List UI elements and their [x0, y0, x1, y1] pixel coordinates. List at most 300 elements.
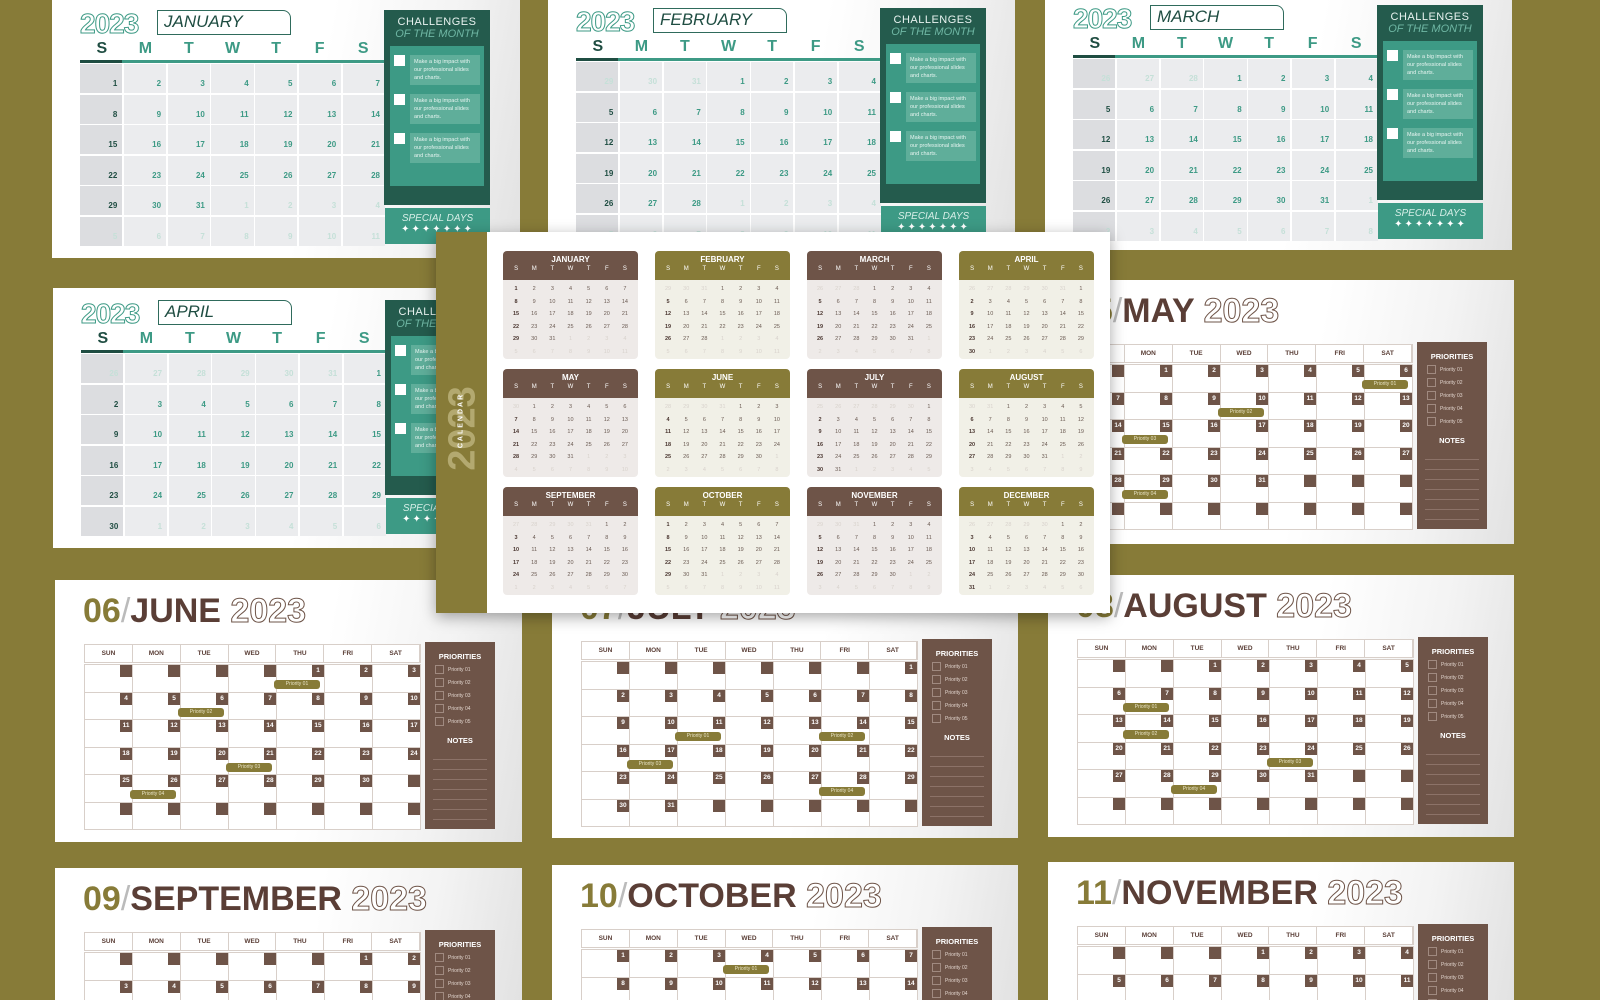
- center card: 2023 yearly calendar: 6: [891, 348, 894, 354]
- center card: 2023 yearly calendar: 17: [969, 560, 975, 566]
- center card: 2023 yearly calendar: 29: [683, 404, 689, 410]
- center card: 2023 yearly calendar: S: [1079, 266, 1083, 272]
- slide: April (teal): 18: [197, 461, 206, 470]
- center card: 2023 yearly calendar: 4: [515, 466, 518, 472]
- slide: January (teal): 8: [244, 232, 249, 241]
- center card: 2023 yearly calendar: 29: [871, 572, 878, 578]
- center card: 2023 yearly calendar: 4: [569, 286, 572, 292]
- center card: 2023 yearly calendar: 13: [835, 311, 841, 317]
- center card: 2023 yearly calendar: 4: [1007, 298, 1010, 304]
- center card: 2023 yearly calendar: T: [1043, 384, 1046, 390]
- center card: 2023 yearly calendar: 30: [513, 404, 519, 410]
- center card: 2023 yearly calendar: 27: [513, 522, 519, 528]
- center card: 2023 yearly calendar: 2: [605, 454, 608, 460]
- slide: April (teal): 5: [245, 400, 250, 409]
- slide: March (teal): 28: [1189, 196, 1198, 205]
- slide: June (brown): 4: [124, 694, 128, 702]
- center card: 2023 yearly calendar: 21: [853, 560, 859, 566]
- center card: 2023 yearly calendar: 7: [855, 534, 858, 540]
- slide: July (brown): 13: [811, 719, 819, 726]
- slide: September (brown): 6: [268, 982, 272, 990]
- center card: 2023 yearly calendar: S: [1079, 384, 1083, 390]
- slide: October (brown): TUE: [695, 935, 708, 942]
- center card: 2023 yearly calendar: 20: [890, 442, 896, 448]
- center card: 2023 yearly calendar: T: [739, 266, 742, 272]
- center card: 2023 yearly calendar: 30: [1023, 454, 1030, 460]
- center card: 2023 yearly calendar: 19: [683, 442, 689, 448]
- center card: 2023 yearly calendar: 1: [721, 286, 724, 292]
- slide: August (brown): FRI: [1335, 645, 1346, 652]
- slide: June (brown): 23: [362, 750, 370, 756]
- slide: August (brown): Priority 05: [1441, 714, 1464, 720]
- slide: April (teal): 5: [333, 522, 337, 531]
- center card: 2023 yearly calendar: 8: [605, 534, 608, 540]
- slide: April (teal): CHALLENGES: [398, 306, 477, 318]
- slide: January (teal): Make a big impact with our professional slides and charts.: [414, 59, 470, 81]
- center card: 2023 yearly calendar: 29: [817, 522, 823, 528]
- center card: 2023 yearly calendar: 16: [531, 311, 537, 317]
- center card: 2023 yearly calendar: 18: [853, 442, 859, 448]
- slide: October (brown): Priority 02: [945, 964, 968, 970]
- center card: 2023 yearly calendar: 2: [873, 466, 876, 472]
- center card: 2023 yearly calendar: 27: [701, 454, 707, 460]
- center card: 2023 yearly calendar: 2: [623, 522, 626, 528]
- slide: June (brown): Priority 04: [448, 706, 471, 712]
- center card: 2023 yearly calendar: 7: [515, 416, 518, 422]
- center card: 2023 yearly calendar: 24: [987, 336, 993, 342]
- slide: June (brown): FRI: [342, 650, 353, 657]
- center card: 2023 yearly calendar: 14: [719, 429, 726, 435]
- slide: July (brown): 07/JULY 2023: [580, 589, 796, 627]
- center card: 2023 yearly calendar: 4: [775, 336, 778, 342]
- center card: 2023 yearly calendar: 6: [891, 416, 894, 422]
- slide: May (brown): Priority 03: [1440, 392, 1463, 398]
- slide: July (brown): 7: [861, 692, 865, 698]
- slide: February (teal): 2: [784, 77, 788, 86]
- center card: 2023 yearly calendar: F: [757, 266, 761, 272]
- slide: August (brown): 5: [1405, 662, 1409, 669]
- center card: 2023 yearly calendar: 5: [1061, 348, 1064, 354]
- center card: 2023 yearly calendar: 7: [909, 348, 912, 354]
- slide: May (brown): 12: [1354, 394, 1362, 402]
- center card: 2023 yearly calendar: 15: [604, 547, 610, 553]
- slide: February (teal): 30: [648, 77, 657, 86]
- center card: 2023 yearly calendar: 21: [586, 560, 592, 566]
- center card: 2023 yearly calendar: 8: [569, 348, 572, 354]
- center card: 2023 yearly calendar: 29: [1078, 336, 1084, 342]
- slide: May (brown): 25: [1306, 450, 1314, 456]
- slide: July (brown): 20: [811, 746, 819, 754]
- slide: March (teal): 8: [1237, 105, 1242, 114]
- center card: 2023 yearly calendar: 3: [989, 298, 992, 304]
- center card: 2023 yearly calendar: 24: [701, 560, 707, 566]
- center card: 2023 yearly calendar: 12: [586, 298, 592, 304]
- center card: 2023 yearly calendar: 10: [774, 416, 780, 422]
- center card: 2023 yearly calendar: 9: [739, 348, 742, 354]
- center card: 2023 yearly calendar: 20: [835, 560, 841, 566]
- center card: 2023 yearly calendar: 9: [623, 534, 626, 540]
- center card: 2023 yearly calendar: 26: [549, 572, 555, 578]
- center card: 2023 yearly calendar: 22: [513, 324, 519, 330]
- center card: 2023 yearly calendar: 28: [853, 572, 859, 578]
- center card: 2023 yearly calendar: F: [909, 502, 913, 508]
- center card: 2023 yearly calendar: 3: [837, 348, 840, 354]
- slide: March (teal): 5: [1106, 105, 1110, 114]
- center card: 2023 yearly calendar: 29: [665, 572, 671, 578]
- slide: September (brown): Priority 03: [448, 980, 471, 986]
- slide: January (teal): OF THE MONTH: [395, 28, 479, 40]
- center card: 2023 yearly calendar: 24: [835, 454, 841, 460]
- center card: 2023 yearly calendar: 2: [739, 572, 742, 578]
- slide: April (teal): Make a big impact with our professional slides and charts.: [415, 427, 471, 449]
- center card: 2023 yearly calendar: 30: [835, 522, 841, 528]
- center card: 2023 yearly calendar: 19: [1078, 429, 1084, 435]
- center card: 2023 yearly calendar: 29: [531, 454, 537, 460]
- slide: November (brown): MON: [1142, 932, 1157, 939]
- slide: September (brown): SAT: [389, 938, 402, 945]
- center card: 2023 yearly calendar: 1: [667, 522, 670, 528]
- center card: 2023 yearly calendar: 1: [739, 404, 742, 410]
- slide: June (brown): 21: [266, 750, 274, 756]
- center card: 2023 yearly calendar: 23: [683, 560, 689, 566]
- center card: 2023 yearly calendar: 27: [567, 572, 574, 578]
- slide: March (teal): 26: [1101, 196, 1110, 205]
- center card: 2023 yearly calendar: S: [775, 384, 779, 390]
- center card: 2023 yearly calendar: 30: [683, 572, 689, 578]
- slide: March (teal): S: [1089, 35, 1100, 52]
- slide: July (brown): SAT: [886, 647, 899, 654]
- center card: 2023 yearly calendar: 13: [1023, 547, 1030, 553]
- center card: 2023 yearly calendar: 10: [756, 348, 762, 354]
- center card: 2023 yearly calendar: 1: [1061, 454, 1064, 460]
- slide: October (brown): 4: [765, 952, 769, 959]
- center card: 2023 yearly calendar: 20: [683, 324, 689, 330]
- slide: February (teal): 25: [867, 169, 876, 178]
- center card: 2023 yearly calendar: 10: [969, 547, 975, 553]
- center card: 2023 yearly calendar: 16: [622, 547, 628, 553]
- slide: September (brown): Priority 01: [448, 954, 471, 960]
- slide: January (teal): 27: [327, 171, 336, 180]
- center card: 2023 yearly calendar: W: [568, 266, 573, 272]
- center card: 2023 yearly calendar: 6: [757, 522, 760, 528]
- center card: 2023 yearly calendar: 5: [819, 534, 822, 540]
- center card: 2023 yearly calendar: 26: [969, 286, 975, 292]
- center card: 2023 yearly calendar: 2: [819, 416, 822, 422]
- center card: 2023 yearly calendar: 4: [623, 336, 626, 342]
- slide: February (teal): 28: [692, 199, 701, 208]
- center card: 2023 yearly calendar: 6: [551, 466, 554, 472]
- center card: 2023 yearly calendar: 9: [533, 298, 536, 304]
- slide: February (teal): 27: [648, 199, 657, 208]
- center card: 2023 yearly calendar: 9: [757, 416, 760, 422]
- slide: October (brown): 10: [715, 980, 723, 986]
- slide: August (brown): 23: [1259, 744, 1267, 752]
- slide: August (brown): Priority 02: [1441, 674, 1464, 680]
- center card: 2023 yearly calendar: 6: [703, 416, 706, 422]
- slide: May (brown): PRIORITIES: [1431, 352, 1473, 361]
- slide: May (brown): 22: [1162, 450, 1170, 456]
- center card: 2023 yearly calendar: 16: [1078, 547, 1084, 553]
- slide: July (brown): 29: [907, 774, 915, 781]
- slide: January (teal): Make a big impact with our professional slides and charts.: [414, 98, 470, 120]
- center card: 2023 yearly calendar: 15: [738, 429, 744, 435]
- center card: 2023 yearly calendar: 12: [549, 547, 555, 553]
- center card: 2023 yearly calendar: 18: [1005, 324, 1011, 330]
- slide: January (teal): 1: [113, 79, 117, 88]
- center card: 2023 yearly calendar: 27: [890, 454, 896, 460]
- slide: October (brown): WED: [741, 935, 757, 942]
- slide: June (brown): 24: [410, 750, 418, 756]
- center card: 2023 yearly calendar: 5: [873, 348, 876, 354]
- center card: 2023 yearly calendar: 21: [719, 442, 726, 448]
- slide: July (brown): 5: [765, 692, 769, 698]
- slide: June (brown): 12: [170, 722, 178, 729]
- slide: April (teal): 12: [241, 430, 250, 439]
- center card: 2023 yearly calendar: 5: [927, 466, 930, 472]
- slide: March (teal): OF THE MONTH: [1388, 23, 1472, 35]
- slide: May (brown): 3: [1260, 367, 1264, 374]
- center card: 2023 yearly calendar: 31: [908, 336, 914, 342]
- center card: 2023 yearly calendar: S: [818, 266, 822, 272]
- center card: 2023 yearly calendar: 30: [622, 572, 628, 578]
- slide: March (teal): 24: [1320, 166, 1329, 175]
- center card: 2023 yearly calendar: 24: [567, 442, 574, 448]
- center card: 2023 yearly calendar: 10: [701, 534, 707, 540]
- slide: February (teal): 4: [872, 77, 876, 86]
- slide: August (brown): 29: [1211, 772, 1219, 779]
- slide: August (brown): THU: [1286, 645, 1300, 652]
- center card: 2023 yearly calendar: 9: [1025, 416, 1028, 422]
- center card: 2023 yearly calendar: 3: [775, 404, 778, 410]
- center card: 2023 yearly calendar: 22: [926, 442, 932, 448]
- center card: 2023 yearly calendar: 29: [513, 336, 519, 342]
- slide: June (brown): 13: [218, 722, 226, 729]
- slide: June (brown): NOTES: [447, 736, 473, 745]
- center card: 2023 yearly calendar: 6: [739, 466, 742, 472]
- slide: January (teal): 30: [152, 201, 161, 210]
- slide: January (teal): 21: [371, 140, 380, 149]
- center card: 2023 yearly calendar: 7: [703, 298, 706, 304]
- center card: 2023 yearly calendar: 19: [871, 442, 878, 448]
- slide: January (teal): W: [225, 40, 240, 57]
- slide: February (teal): 7: [696, 108, 701, 117]
- slide: May (brown): 2: [1212, 367, 1216, 374]
- slide: August (brown): Priority 04: [1183, 786, 1205, 792]
- slide: June (brown): 26: [170, 777, 178, 784]
- center card: 2023 yearly calendar: 2: [891, 286, 894, 292]
- slide: April (teal): 28: [197, 369, 206, 378]
- slide: August (brown): 28: [1163, 772, 1171, 779]
- center card: 2023 yearly calendar: T: [587, 266, 590, 272]
- center card: 2023 yearly calendar: T: [739, 502, 742, 508]
- slide: August (brown): 20: [1115, 744, 1123, 752]
- slide: January (teal): F: [315, 40, 325, 57]
- slide: May (brown): 05/MAY 2023: [1075, 292, 1279, 330]
- center card: 2023 yearly calendar: 4: [1043, 348, 1046, 354]
- slide: March (teal): 7: [1193, 105, 1198, 114]
- slide: July (brown): 14: [859, 719, 867, 726]
- slide: February (teal): S: [854, 38, 865, 55]
- slide: August (brown): 7: [1165, 690, 1169, 696]
- center card: 2023 yearly calendar: 15: [926, 429, 932, 435]
- center card: 2023 yearly calendar: 10: [908, 298, 914, 304]
- slide: April (teal): Make a big impact with our professional slides and charts.: [415, 349, 471, 371]
- slide: May (brown): 27: [1402, 450, 1410, 456]
- center card: 2023 yearly calendar: JANUARY: [551, 255, 590, 264]
- center card: 2023 yearly calendar: 4: [569, 584, 572, 590]
- slide: May (brown): 24: [1258, 450, 1266, 456]
- slide: October (brown): SAT: [886, 935, 899, 942]
- center card: 2023 yearly calendar: 8: [873, 298, 876, 304]
- center card: 2023 yearly calendar: 21: [622, 311, 628, 317]
- center card: 2023 yearly calendar: 7: [1043, 466, 1046, 472]
- slide: May (brown): 17: [1258, 422, 1266, 429]
- center card: 2023 yearly calendar: T: [587, 384, 590, 390]
- center card: 2023 yearly calendar: 25: [1060, 442, 1066, 448]
- center card: 2023 yearly calendar: 28: [622, 324, 628, 330]
- center card: 2023 yearly calendar: 10: [604, 348, 610, 354]
- slide: August (brown): Priority 01: [1135, 704, 1157, 710]
- center card: 2023 yearly calendar: W: [1024, 502, 1029, 508]
- center card: 2023 yearly calendar: 8: [927, 416, 930, 422]
- slide: August (brown): 18: [1355, 717, 1363, 724]
- center card: 2023 yearly calendar: W: [872, 502, 877, 508]
- center card: 2023 yearly calendar: 23: [890, 560, 896, 566]
- slide: January (teal): 26: [284, 171, 292, 180]
- slide: October (brown): 7: [909, 952, 913, 959]
- slide: February (teal): 11: [868, 230, 876, 239]
- center card: 2023 yearly calendar: 28: [853, 336, 859, 342]
- slide: February (teal): 14: [692, 138, 701, 147]
- center card: 2023 yearly calendar: 3: [623, 454, 626, 460]
- slide: July (brown): 28: [859, 774, 867, 781]
- center card: 2023 yearly calendar: 24: [908, 560, 914, 566]
- slide: September (brown): TUE: [198, 938, 211, 945]
- center card: 2023 yearly calendar: W: [720, 502, 725, 508]
- slide: January (teal): T: [271, 40, 281, 57]
- slide: March (teal): [1045, 0, 1512, 250]
- slide: February (teal): 18: [867, 138, 876, 147]
- slide: July (brown): Priority 03: [639, 760, 661, 766]
- center card: 2023 yearly calendar: 9: [739, 584, 742, 590]
- slide: April (teal): W: [226, 330, 241, 347]
- slide: June (brown): Priority 03: [448, 692, 471, 698]
- center card: 2023 yearly calendar: 14: [774, 534, 780, 540]
- center card: 2023 yearly calendar: 18: [1060, 429, 1066, 435]
- center card: 2023 yearly calendar: 31: [969, 584, 975, 590]
- center card: 2023 yearly calendar: 9: [1079, 466, 1082, 472]
- center card: 2023 yearly calendar: 17: [513, 560, 519, 566]
- slide: March (teal): 11: [1365, 105, 1373, 114]
- center card: 2023 yearly calendar: 29: [665, 286, 671, 292]
- slide: July (brown): 4: [717, 692, 721, 698]
- slide: February (teal): 2023: [576, 6, 634, 37]
- slide: July (brown): 9: [621, 719, 625, 726]
- slide: July (brown): 17: [667, 746, 675, 754]
- center card: 2023 yearly calendar: 26: [1078, 442, 1084, 448]
- slide: April (teal): 28: [328, 491, 337, 500]
- center card: 2023 yearly calendar: 27: [853, 404, 859, 410]
- slide: March (teal): Make a big impact with our professional slides and charts.: [1407, 93, 1463, 115]
- slide: October (brown): SUN: [599, 935, 612, 942]
- slide: August (brown): 27: [1115, 772, 1123, 779]
- slide: January (teal): 16: [152, 140, 161, 149]
- slide: January (teal): T: [184, 40, 194, 57]
- center card: 2023 yearly calendar: 6: [873, 584, 876, 590]
- slide: April (teal): 21: [328, 461, 337, 470]
- slide: March (teal): W: [1218, 35, 1233, 52]
- slide: May (brown): Priority 04: [1134, 491, 1156, 497]
- center card: 2023 yearly calendar: 31: [1060, 286, 1066, 292]
- slide: March (teal): 31: [1320, 196, 1329, 205]
- slide: February (teal): FEBRUARY: [660, 10, 752, 29]
- slide: February (teal): F: [811, 38, 821, 55]
- center card: 2023 yearly calendar: 11: [853, 429, 859, 435]
- slide: June (brown): 18: [122, 750, 130, 756]
- center card: 2023 yearly calendar: 27: [756, 560, 762, 566]
- slide: August (brown): 10: [1307, 690, 1315, 696]
- slide: March (teal): 25: [1364, 166, 1373, 175]
- slide: July (brown): PRIORITIES: [936, 649, 978, 658]
- slide: July (brown): 19: [763, 746, 771, 754]
- center card: 2023 yearly calendar: 4: [775, 286, 778, 292]
- slide: June (brown): 5: [172, 694, 176, 702]
- slide: July (brown): 1: [909, 664, 913, 671]
- center card: 2023 yearly calendar: W: [568, 502, 573, 508]
- center card: 2023 yearly calendar: 10: [835, 429, 841, 435]
- center card: 2023 yearly calendar: 20: [1042, 324, 1048, 330]
- slide: August (brown): NOTES: [1440, 731, 1466, 740]
- slide: August (brown): WED: [1237, 645, 1253, 652]
- slide: September (brown): MON: [149, 938, 164, 945]
- center card: 2023 yearly calendar: 30: [969, 348, 975, 354]
- center card: 2023 yearly calendar: F: [909, 266, 913, 272]
- center card: 2023 yearly calendar: 6: [1043, 298, 1046, 304]
- slide: April (teal): 1: [377, 369, 381, 378]
- slide: April (teal): 22: [372, 461, 381, 470]
- center card: 2023 yearly calendar: S: [970, 384, 974, 390]
- center card: 2023 yearly calendar: 19: [549, 560, 555, 566]
- slide: August (brown): 9: [1261, 690, 1265, 696]
- center card: 2023 yearly calendar: 29: [604, 572, 610, 578]
- center card: 2023 yearly calendar: 12: [817, 311, 823, 317]
- center card: 2023 yearly calendar: 21: [908, 442, 914, 448]
- center card: 2023 yearly calendar: 2: [533, 286, 536, 292]
- center card: 2023 yearly calendar: 7: [721, 416, 724, 422]
- center card: 2023 yearly calendar: 21: [1060, 324, 1066, 330]
- center card: 2023 yearly calendar: 3: [605, 336, 608, 342]
- slide: February (teal): 11: [868, 108, 876, 117]
- slide: October (brown): 12: [811, 980, 819, 986]
- center card: 2023 yearly calendar: 1: [1007, 404, 1010, 410]
- center card: 2023 yearly calendar: 18: [567, 311, 574, 317]
- center card: 2023 yearly calendar: 27: [683, 336, 689, 342]
- slide: May (brown): 13: [1402, 394, 1410, 402]
- center card: 2023 yearly calendar: 8: [721, 298, 724, 304]
- slide: April (teal): T: [272, 330, 282, 347]
- slide: March (teal): 1: [1237, 74, 1242, 83]
- slide: March (teal): 12: [1101, 135, 1110, 144]
- center card: 2023 yearly calendar: 29: [1023, 286, 1030, 292]
- center card: 2023 yearly calendar: 17: [701, 547, 707, 553]
- slide: June (brown): 14: [266, 722, 274, 729]
- slide: July (brown): FRI: [839, 647, 850, 654]
- slide: May (brown): 9: [1212, 394, 1216, 402]
- slide: May (brown): MON: [1141, 350, 1156, 357]
- slide: April (teal): 30: [109, 522, 118, 531]
- center card: 2023 yearly calendar: 26: [817, 286, 823, 292]
- center card: 2023 yearly calendar: 10: [756, 298, 762, 304]
